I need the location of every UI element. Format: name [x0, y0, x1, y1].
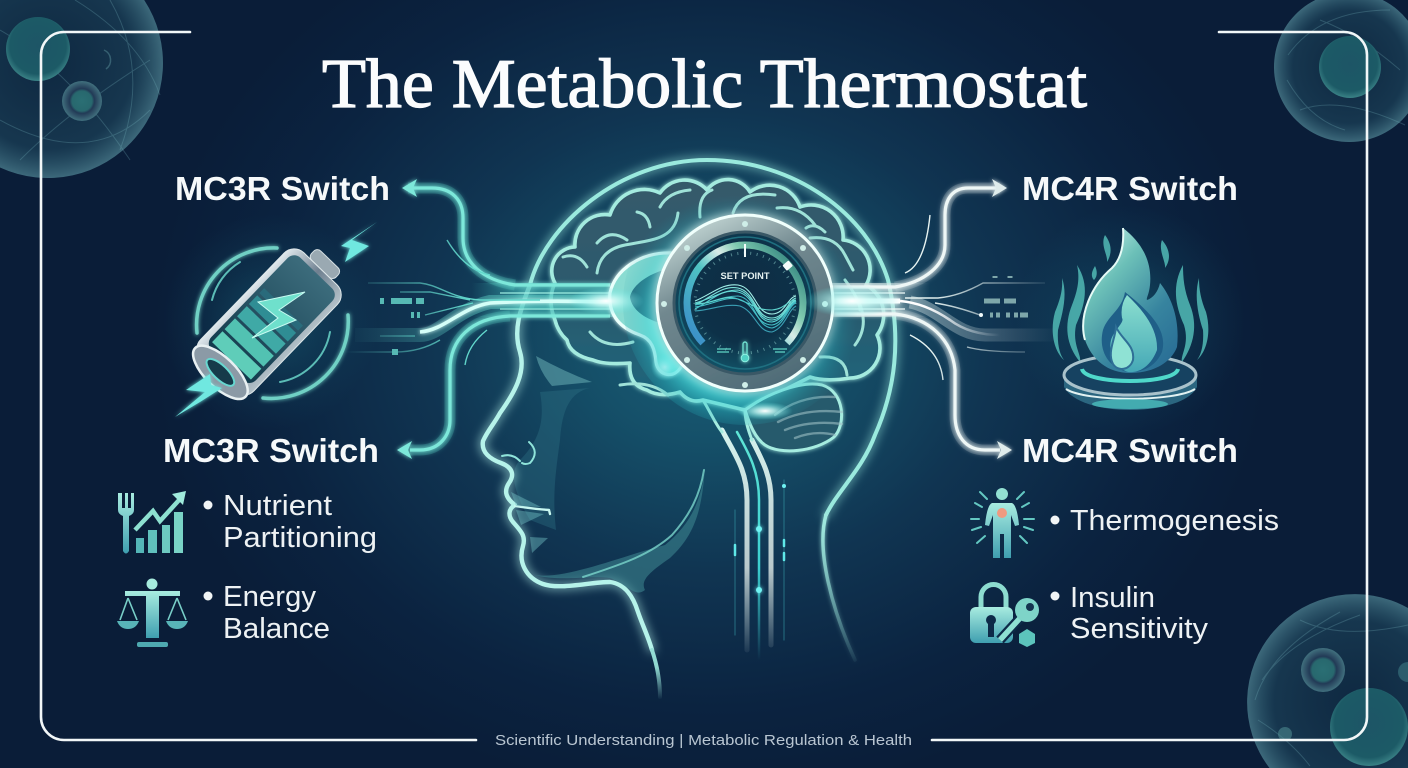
heading: MC4R top: MC4R Switch	[1022, 170, 1238, 207]
icon: radiating body	[971, 488, 1034, 558]
data dashes	[984, 276, 1028, 315]
flame edge light	[1083, 228, 1123, 340]
spark bottom left	[175, 374, 222, 417]
front ring	[1082, 369, 1178, 381]
lower branch line	[410, 316, 610, 450]
label: thermogenesis: Thermogenesis	[1070, 505, 1279, 537]
node flare left	[568, 287, 644, 315]
heading: MC3R top: MC3R Switch	[175, 170, 390, 207]
bullet	[1050, 516, 1060, 524]
thin traces	[345, 240, 540, 365]
label: insulin sensitivity	[1070, 582, 1209, 645]
data dashes	[380, 301, 424, 352]
face contour	[483, 285, 652, 650]
lower branch	[895, 314, 1000, 450]
lip shade	[511, 492, 548, 553]
hypothalamus	[610, 253, 685, 381]
label: insulin sensitivity: Sensitivity	[1070, 613, 1209, 645]
band lines	[500, 293, 610, 309]
gauge ticks	[695, 253, 795, 353]
set point label: SET POINT	[720, 271, 770, 281]
upper branch line	[408, 188, 610, 285]
face shading	[514, 388, 590, 530]
skull outline	[530, 160, 895, 515]
jaw line	[535, 467, 705, 593]
decorative cell: top right	[1274, 0, 1408, 142]
icon: lock and key	[970, 584, 1039, 647]
node flare cerebellum	[737, 402, 793, 420]
icon: fork and chart	[118, 491, 186, 554]
jaw highlight	[583, 470, 704, 577]
cerebellum folds	[775, 397, 842, 438]
spinal cord	[722, 430, 786, 660]
orbit arcs	[197, 248, 348, 398]
icon: balance figure	[117, 578, 188, 647]
label: nutrient partitioning	[223, 490, 377, 554]
inner shadow flame	[1102, 292, 1163, 372]
outer flame	[1083, 228, 1178, 373]
decorative cell: top left	[0, 0, 163, 178]
core flame	[1111, 327, 1133, 369]
band lines	[830, 293, 905, 309]
band	[825, 283, 930, 317]
bullet	[204, 500, 212, 510]
spark top right	[341, 222, 377, 262]
bright core tail	[900, 301, 1000, 335]
inner rim	[679, 237, 811, 369]
icon: flame	[1015, 205, 1245, 435]
node flare right	[804, 285, 900, 317]
head profile	[483, 160, 895, 697]
wave	[695, 285, 796, 332]
bullet	[1050, 592, 1060, 600]
thermostat dial	[623, 181, 867, 425]
upper branch	[895, 188, 1000, 287]
battery body	[183, 234, 356, 409]
heading: MC3R lower: MC3R Switch	[163, 432, 379, 469]
label: energy balance	[223, 581, 330, 645]
arrowhead lower	[397, 441, 412, 459]
top marker	[744, 244, 746, 257]
right pipes	[825, 179, 1060, 459]
temple shading	[536, 356, 592, 386]
thick fan	[910, 302, 1060, 335]
lips	[515, 506, 550, 514]
brain stem base	[703, 400, 752, 440]
upper branch line	[830, 188, 1000, 287]
thin traces	[905, 215, 1045, 380]
nostril	[502, 442, 535, 464]
cerebellum	[745, 384, 842, 451]
gauge arc	[687, 245, 803, 343]
arrowhead upper	[402, 179, 417, 197]
label: energy balance: Balance	[223, 613, 330, 645]
label: nutrient partitioning: Nutrient	[223, 490, 332, 522]
label: insulin sensitivity: Insulin	[1070, 582, 1155, 614]
neck fade overlay	[652, 650, 660, 697]
middle flame	[1110, 295, 1157, 372]
title: The Metabolic Thermostat	[322, 46, 1088, 123]
back of neck	[823, 515, 855, 660]
arrowhead lower	[997, 441, 1012, 459]
icon: battery	[162, 214, 378, 430]
bullet	[204, 592, 212, 600]
arrowhead upper	[992, 179, 1007, 197]
brain	[551, 180, 884, 451]
needle marker	[782, 260, 793, 271]
brain folds	[563, 190, 863, 395]
upper branch	[408, 188, 515, 285]
thick fan	[355, 302, 610, 335]
screws	[661, 221, 828, 388]
heading: MC4R lower: MC4R Switch	[1022, 432, 1238, 469]
side wisps	[1053, 235, 1208, 362]
left pipes	[345, 179, 615, 459]
list: MC4R items	[970, 488, 1279, 647]
label: nutrient partitioning: Partitioning	[223, 522, 377, 554]
footer caption: Scientific Understanding | Metabolic Regulation & Health	[495, 732, 912, 749]
burner base	[1064, 375, 1197, 410]
lower branch	[410, 316, 510, 450]
decorative cell: bottom right	[1247, 594, 1408, 768]
list: MC3R items	[117, 490, 377, 647]
lower branch line	[830, 314, 1000, 450]
band	[472, 283, 615, 317]
small flow marks	[717, 349, 787, 352]
bright core	[420, 301, 610, 332]
bright core	[825, 298, 900, 304]
label: energy balance: Energy	[223, 581, 317, 613]
charge cells	[212, 288, 303, 380]
bolt on battery	[252, 292, 305, 338]
thermometer	[741, 342, 749, 362]
